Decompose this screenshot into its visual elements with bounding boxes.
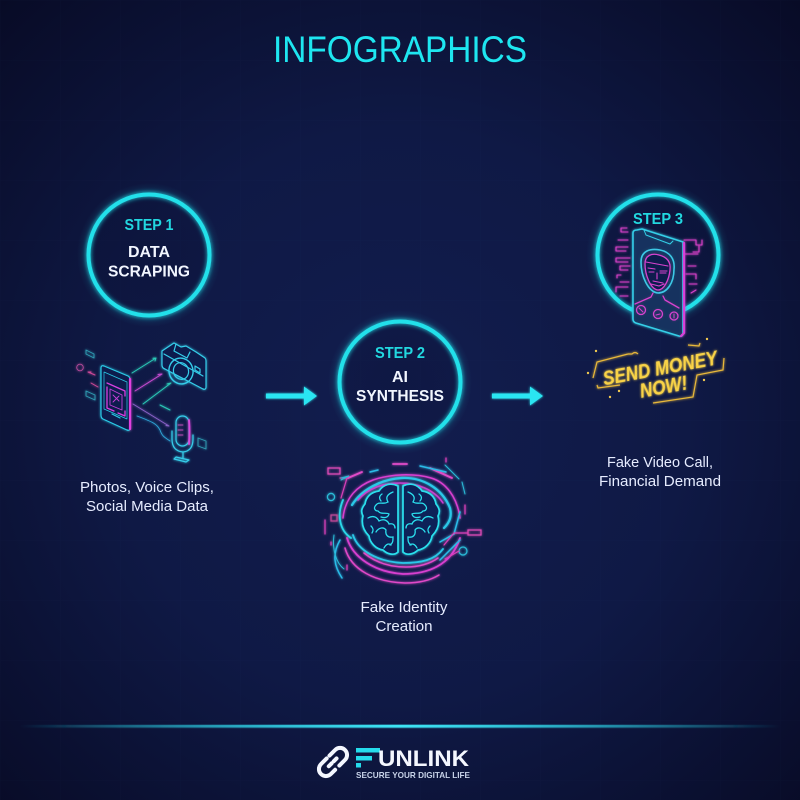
step 3 caption: Financial Demand <box>599 474 721 490</box>
step 2 heading: SYNTHESIS <box>356 388 444 405</box>
arrow: step 1 to step 2 <box>266 386 317 406</box>
step 1 caption: Photos, Voice Clips, <box>80 480 214 496</box>
step 2 caption: Fake Identity <box>360 600 448 616</box>
brain <box>362 484 439 554</box>
step 2 heading: AI <box>392 369 408 386</box>
icon: AI brain <box>325 458 481 583</box>
deepfake face <box>635 249 679 308</box>
callout frame <box>593 343 724 403</box>
small data tags <box>77 350 206 449</box>
icon: phone <box>101 366 130 430</box>
panel: step 1 <box>77 183 221 515</box>
step 3 label: STEP 3 <box>633 211 683 228</box>
step 3 circle <box>586 183 730 327</box>
icon: fake video call phone <box>616 228 702 336</box>
phone notch <box>644 230 673 244</box>
glitch fragments <box>616 228 702 296</box>
icon: data scraping <box>77 343 206 462</box>
step 1 caption: Social Media Data <box>86 499 209 515</box>
circuit details <box>325 458 481 570</box>
wordmark: UNLINK <box>378 746 470 771</box>
callout text: SEND MONEY <box>601 347 721 390</box>
arrows: data flows <box>88 358 171 441</box>
icon: chain link <box>316 745 350 779</box>
phone body <box>633 229 683 336</box>
footer divider <box>20 725 780 728</box>
step 2 circle <box>328 310 472 454</box>
callout: send money now <box>587 338 724 409</box>
callout dots <box>587 338 708 398</box>
step 1 heading: DATA <box>128 244 170 261</box>
step 1 label: STEP 1 <box>124 217 174 234</box>
icon: microphone <box>172 416 193 462</box>
step 2 label: STEP 2 <box>375 345 425 362</box>
callout text <box>601 347 724 409</box>
call buttons <box>636 306 678 320</box>
magenta and cyan orbit rings <box>335 464 460 583</box>
icon: camera <box>162 343 206 389</box>
panel: step 2 <box>325 310 481 635</box>
callout text: NOW! <box>638 372 690 403</box>
step 1 heading: SCRAPING <box>108 264 190 280</box>
step 2 caption: Creation <box>376 619 432 635</box>
arrow: step 2 to step 3 <box>492 386 543 406</box>
phone edge <box>681 243 684 336</box>
step 3 caption: Fake Video Call, <box>607 455 713 471</box>
icon: F mark <box>356 748 380 768</box>
logo: funlink <box>316 745 470 780</box>
title: INFOGRAPHICS <box>273 29 527 70</box>
panel: step 3 <box>586 183 730 490</box>
tagline: SECURE YOUR DIGITAL LIFE <box>356 770 470 780</box>
step 1 circle <box>77 183 221 327</box>
